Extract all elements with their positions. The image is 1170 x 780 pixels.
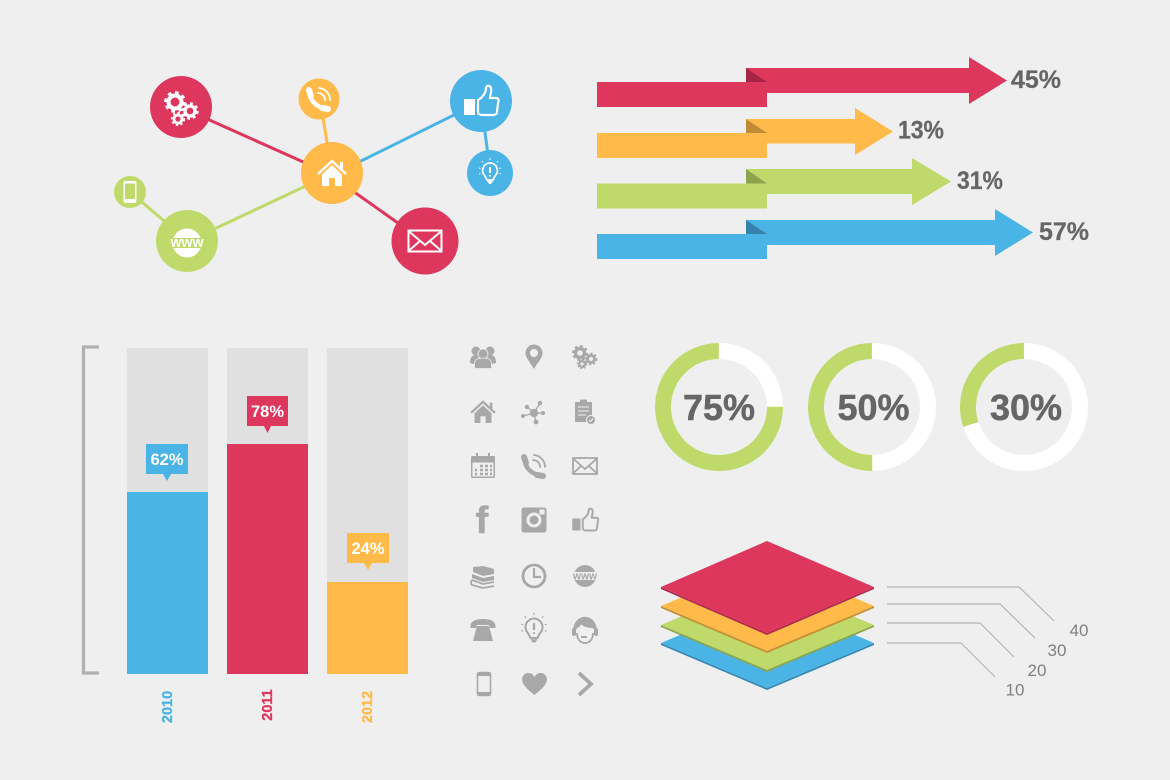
- panel: donut charts: [663, 336, 1095, 478]
- bar: 2011: [227, 348, 308, 721]
- icon: heart: [522, 673, 547, 695]
- value labels: 40: [1070, 621, 1088, 640]
- icon: light bulb: [521, 613, 547, 643]
- value labels: [1006, 621, 1088, 700]
- node: mobile: [114, 176, 146, 208]
- arrow: 31%: 31%: [957, 167, 1003, 195]
- bar: 2011: 78%: [251, 403, 284, 421]
- arrow: 57%: 57%: [1039, 218, 1089, 246]
- donut: 75%: [663, 351, 775, 463]
- arrow: 13%: [597, 108, 944, 158]
- icon: instagram: [522, 508, 546, 532]
- bar: 2011: 2011: [260, 689, 276, 721]
- arrow: 13%: 13%: [898, 116, 944, 144]
- node: phone: [298, 78, 340, 120]
- icon: chevron: [579, 673, 591, 695]
- donut: 75%: 75%: [683, 387, 755, 428]
- icon: facebook: f: [476, 500, 489, 542]
- icon: clipboard: [575, 400, 596, 424]
- node: light bulb: [467, 150, 513, 196]
- icon: mail: [573, 458, 597, 474]
- icon: www: www: [572, 570, 597, 582]
- node: thumbs up: [450, 70, 512, 132]
- node: gears: [150, 76, 212, 138]
- layer: green 20: [661, 580, 874, 672]
- icon: home: [471, 402, 495, 423]
- leader lines: [887, 587, 1054, 677]
- bar: 2010: 62%: [150, 451, 184, 469]
- value labels: 20: [1028, 661, 1046, 680]
- arrow: 45%: 45%: [1011, 66, 1061, 94]
- icon: phone: [524, 455, 545, 476]
- icon: clock: [523, 565, 545, 587]
- panel: layer stack: [661, 541, 1088, 700]
- icon: gears: [573, 346, 596, 368]
- bar: 2012: 2012: [360, 691, 376, 723]
- donut: 50%: [816, 351, 928, 463]
- node: mail: [392, 208, 458, 274]
- node: home: [301, 142, 363, 204]
- donut: 30%: 30%: [990, 387, 1062, 428]
- layer: red 40: [661, 541, 874, 635]
- value labels: 10: [1006, 680, 1024, 700]
- icon: books: [471, 566, 494, 588]
- layer: blue 10: [661, 598, 874, 690]
- icon: calendar: [471, 453, 495, 478]
- icon: www: [572, 565, 598, 587]
- icon: map pin: [526, 344, 542, 369]
- donut: 50%: 50%: [837, 387, 910, 428]
- value labels: 30: [1048, 641, 1066, 660]
- icon: people: [470, 346, 496, 368]
- arrow: 31%: [597, 158, 1003, 208]
- bracket axis: [84, 347, 99, 673]
- node: www: www: [170, 234, 204, 251]
- bar: 2010: 2010: [160, 691, 176, 723]
- arrow: 45%: [597, 57, 1061, 107]
- node: www: [156, 210, 218, 272]
- layer: orange 30: [661, 561, 874, 653]
- panel: network diagram: [114, 70, 513, 274]
- panel: bar chart: [84, 347, 408, 723]
- bar: 2012: [327, 348, 408, 723]
- bar: 2010: [127, 348, 208, 723]
- panel: arrows chart: [597, 57, 1089, 259]
- icon: thumbs up: [572, 509, 598, 530]
- icon: hub: [521, 401, 545, 424]
- panel: icon grid: [470, 344, 598, 696]
- icon: telephone: [470, 619, 496, 641]
- arrow: 57%: [597, 209, 1089, 259]
- donut: 30%: [953, 336, 1095, 478]
- icon: support agent: [572, 618, 598, 643]
- icon: mobile: [478, 672, 490, 696]
- connector lines: [136, 112, 488, 231]
- bar: 2012: 24%: [351, 540, 385, 558]
